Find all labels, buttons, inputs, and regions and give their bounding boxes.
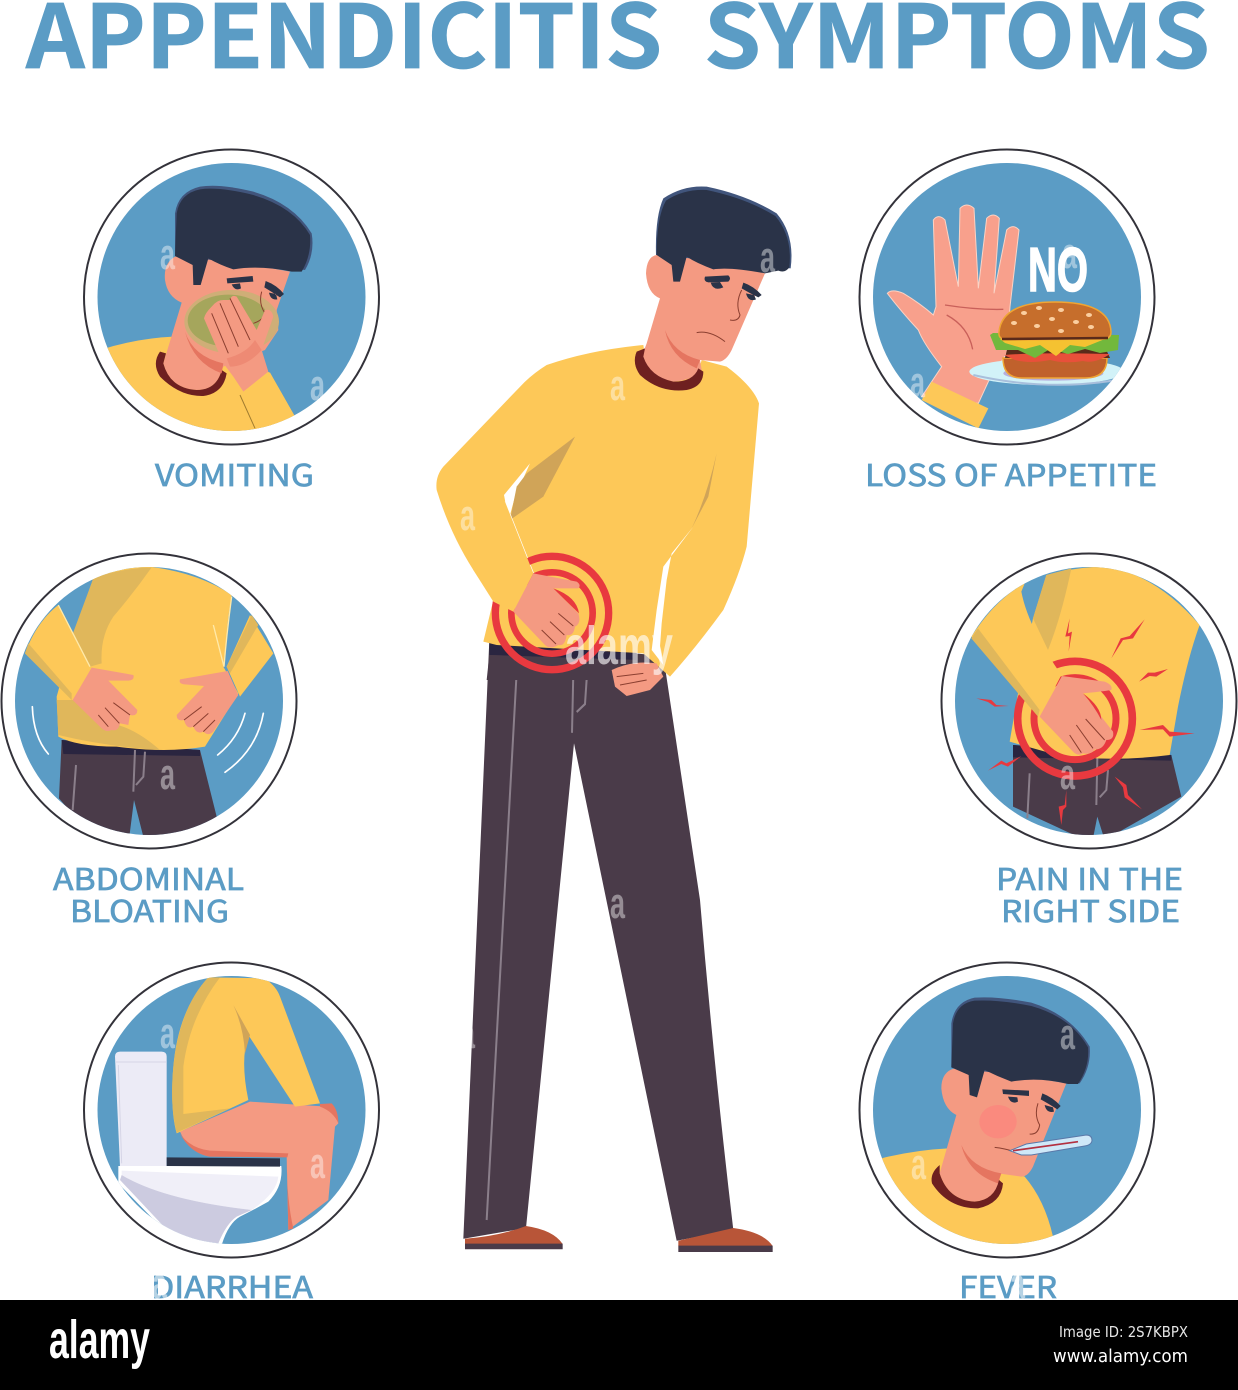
watermarks on figure: a — [760, 233, 775, 282]
upper body — [436, 186, 791, 696]
arms — [25, 605, 84, 688]
panel: vomiting — [84, 150, 379, 450]
eyes and brows — [705, 275, 762, 300]
icon: burger — [990, 302, 1119, 378]
panel: abdominal bloating — [2, 554, 296, 850]
watermarks on figure: alamy — [565, 616, 673, 676]
label: vomiting: VOMITING — [155, 451, 314, 495]
label: loss of appetite: LOSS OF APPETITE — [865, 451, 1157, 495]
watermarks: a — [310, 1139, 325, 1188]
label: diarrhea: DIARRHEA — [151, 1263, 314, 1307]
panel: pain in the right side — [942, 554, 1236, 848]
belt — [489, 642, 637, 660]
image id: Image ID: 2S7KBPX — [1059, 1323, 1188, 1341]
left shoe — [465, 1226, 563, 1244]
watermarks — [910, 229, 1077, 407]
label: pain in the right side — [996, 855, 1183, 931]
central figure: man holding his side — [436, 186, 791, 1252]
watermark: a — [1060, 750, 1075, 799]
green nausea glow — [184, 290, 279, 353]
hands — [73, 668, 137, 731]
sleeve — [254, 372, 294, 430]
hand over mouth — [204, 296, 273, 392]
neck and face — [642, 255, 765, 382]
nose — [253, 292, 265, 323]
trousers — [59, 740, 217, 835]
other hand on hip — [612, 662, 663, 696]
website: www.alamy.com — [1053, 1346, 1188, 1367]
label: fever: a — [1010, 1259, 1025, 1308]
hair — [175, 186, 312, 270]
icon: plate — [969, 360, 1120, 385]
bare legs — [180, 1102, 338, 1230]
label: fever: FEVER — [959, 1263, 1057, 1307]
watermarks: a — [1062, 229, 1077, 278]
watermarks: a — [160, 1009, 175, 1058]
trousers — [1013, 745, 1181, 843]
panel: loss of appetite — [860, 150, 1154, 444]
brows and eyes — [1002, 1089, 1061, 1112]
face and neck — [940, 1068, 1066, 1202]
sweater torso — [57, 567, 238, 750]
hair — [656, 186, 791, 268]
label: diarrhea — [154, 1276, 314, 1298]
watermarks: a — [160, 230, 175, 279]
right shoe — [678, 1228, 773, 1246]
footer logo: alamy — [49, 1310, 150, 1370]
watermark: a — [160, 750, 175, 799]
watermarks — [160, 230, 325, 410]
label: abdominal bloating — [53, 855, 244, 931]
watermarks on figure: a — [610, 361, 625, 410]
footer band — [0, 1300, 1238, 1390]
watermarks: a — [910, 358, 925, 407]
label: pain in the right side: PAIN IN THE — [996, 855, 1183, 899]
sweater — [1010, 567, 1200, 759]
watermarks: a — [1060, 1010, 1075, 1059]
label: diarrhea: a — [152, 1259, 167, 1308]
watermarks on figure: a — [460, 1009, 475, 1058]
sleeve over rings — [463, 502, 533, 612]
watermarks: a — [310, 361, 325, 410]
nose and mouth — [995, 1103, 1040, 1152]
nose and mouth — [697, 290, 742, 342]
brows and eyes — [227, 276, 284, 300]
arm — [971, 583, 1061, 717]
sweater — [436, 345, 759, 677]
icon: raised hand — [887, 205, 1019, 403]
motion lines — [32, 707, 263, 772]
pain target rings — [1018, 661, 1132, 776]
sweater — [882, 1148, 1053, 1244]
label: fever — [962, 1276, 1057, 1298]
watermarks: a — [911, 1140, 926, 1189]
pain target rings — [495, 556, 609, 670]
neck and face — [163, 257, 290, 390]
panel: diarrhea — [84, 962, 379, 1258]
watermarks — [160, 1009, 325, 1188]
hand — [1040, 676, 1113, 755]
watermarks on figure: a — [610, 879, 625, 928]
watermarks — [911, 1010, 1075, 1189]
icon: sleeve cuff — [922, 382, 988, 428]
pain bolts — [976, 618, 1195, 825]
"NO" text: NO — [1028, 236, 1088, 305]
label: abdominal bloating: BLOATING — [70, 887, 229, 931]
label: pain in the right side: RIGHT SIDE — [1001, 887, 1180, 931]
sweater — [172, 977, 320, 1133]
toilet — [115, 1052, 167, 1167]
gaps and folds — [652, 527, 693, 665]
watermarks on figure — [460, 233, 775, 1058]
icon: thermometer — [1010, 1135, 1092, 1155]
hand on abdomen — [513, 573, 580, 647]
label: abdominal bloating: ABDOMINAL — [53, 855, 244, 899]
panel: fever — [860, 962, 1154, 1260]
trousers — [463, 640, 773, 1252]
watermarks on figure: a — [460, 491, 475, 540]
hair — [951, 997, 1090, 1083]
flushed cheek — [979, 1105, 1017, 1138]
